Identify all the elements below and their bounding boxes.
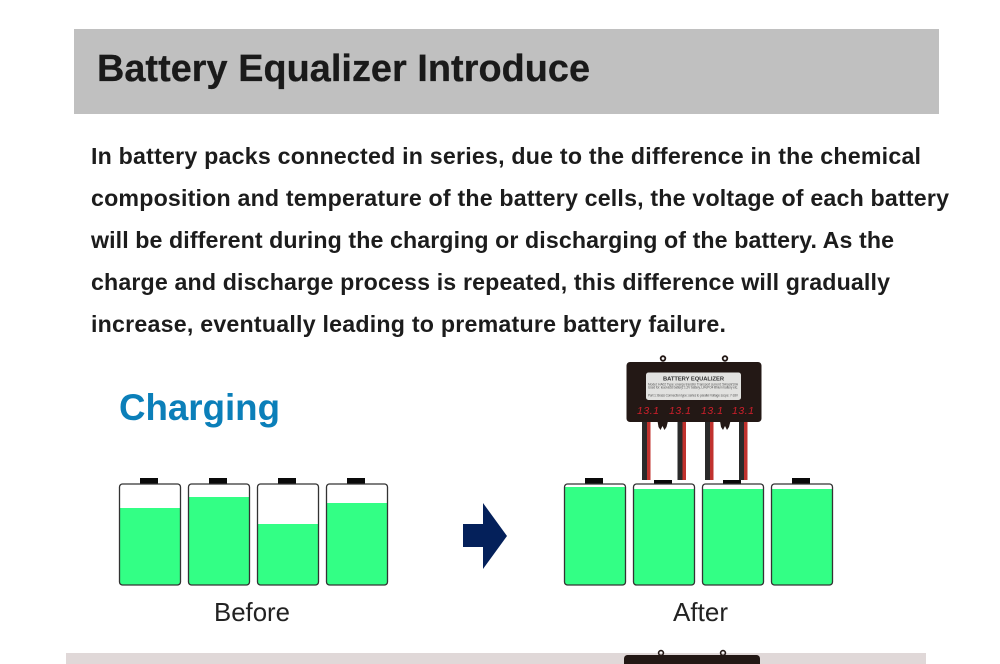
- lower tabs: [658, 421, 730, 430]
- batteries after charging: [564, 478, 832, 585]
- intro paragraph: charge and discharge process is repeated, this difference will gradually: [91, 269, 890, 295]
- device label plate: Used for: lead-acid battery, 1.2V battery, LiFePO4 lithium battery etc.: [648, 386, 738, 390]
- title: Battery Equalizer Introduce: [97, 48, 590, 90]
- battery 3 after: [702, 480, 764, 585]
- battery 2 before: [188, 478, 250, 585]
- intro paragraph: increase, eventually leading to premature battery failure.: [91, 311, 726, 337]
- heading: charging: Charging: [119, 387, 280, 428]
- next section band: [66, 651, 926, 664]
- intro paragraph: In battery packs connected in series, due to the difference in the chemical: [91, 143, 921, 169]
- next section device top: [624, 651, 760, 664]
- batteries before charging: [120, 478, 388, 585]
- connection wires: [642, 420, 748, 480]
- label: before: Before: [214, 599, 290, 627]
- device label plate: [646, 372, 741, 400]
- device label plate: BATTERY EQUALIZER: [663, 376, 725, 382]
- intro paragraph: composition and temperature of the battery cells, the voltage of each battery: [91, 185, 949, 211]
- voltage displays: 13.1: [732, 405, 754, 417]
- voltage displays: 13.1: [701, 405, 723, 417]
- intro paragraph: [90, 143, 949, 337]
- device body: [626, 362, 762, 422]
- battery 1 after: [564, 478, 626, 585]
- battery 4 before: [326, 478, 388, 585]
- battery 3 before: [258, 478, 318, 585]
- battery equalizer device: [626, 356, 762, 480]
- intro paragraph: will be different during the charging or discharging of the battery. As the: [90, 227, 894, 253]
- mounting hooks: [661, 356, 727, 361]
- device label plate: Part 1: Brass Connection type: series to parallel Voltage scope: 7-18V: [648, 394, 739, 398]
- voltage displays: 13.1: [637, 405, 659, 417]
- battery 4 after: [772, 478, 832, 585]
- voltage displays: [637, 405, 754, 417]
- battery 1 before: [120, 478, 180, 585]
- arrow: [463, 503, 507, 569]
- label: after: After: [673, 597, 728, 627]
- header band with title: [74, 29, 939, 114]
- device label plate: Model: HA02 Type: energy transfer Transport current: 5A/cell/10A: [648, 382, 739, 386]
- voltage displays: 13.1: [669, 405, 691, 417]
- battery 2 after: [634, 480, 694, 585]
